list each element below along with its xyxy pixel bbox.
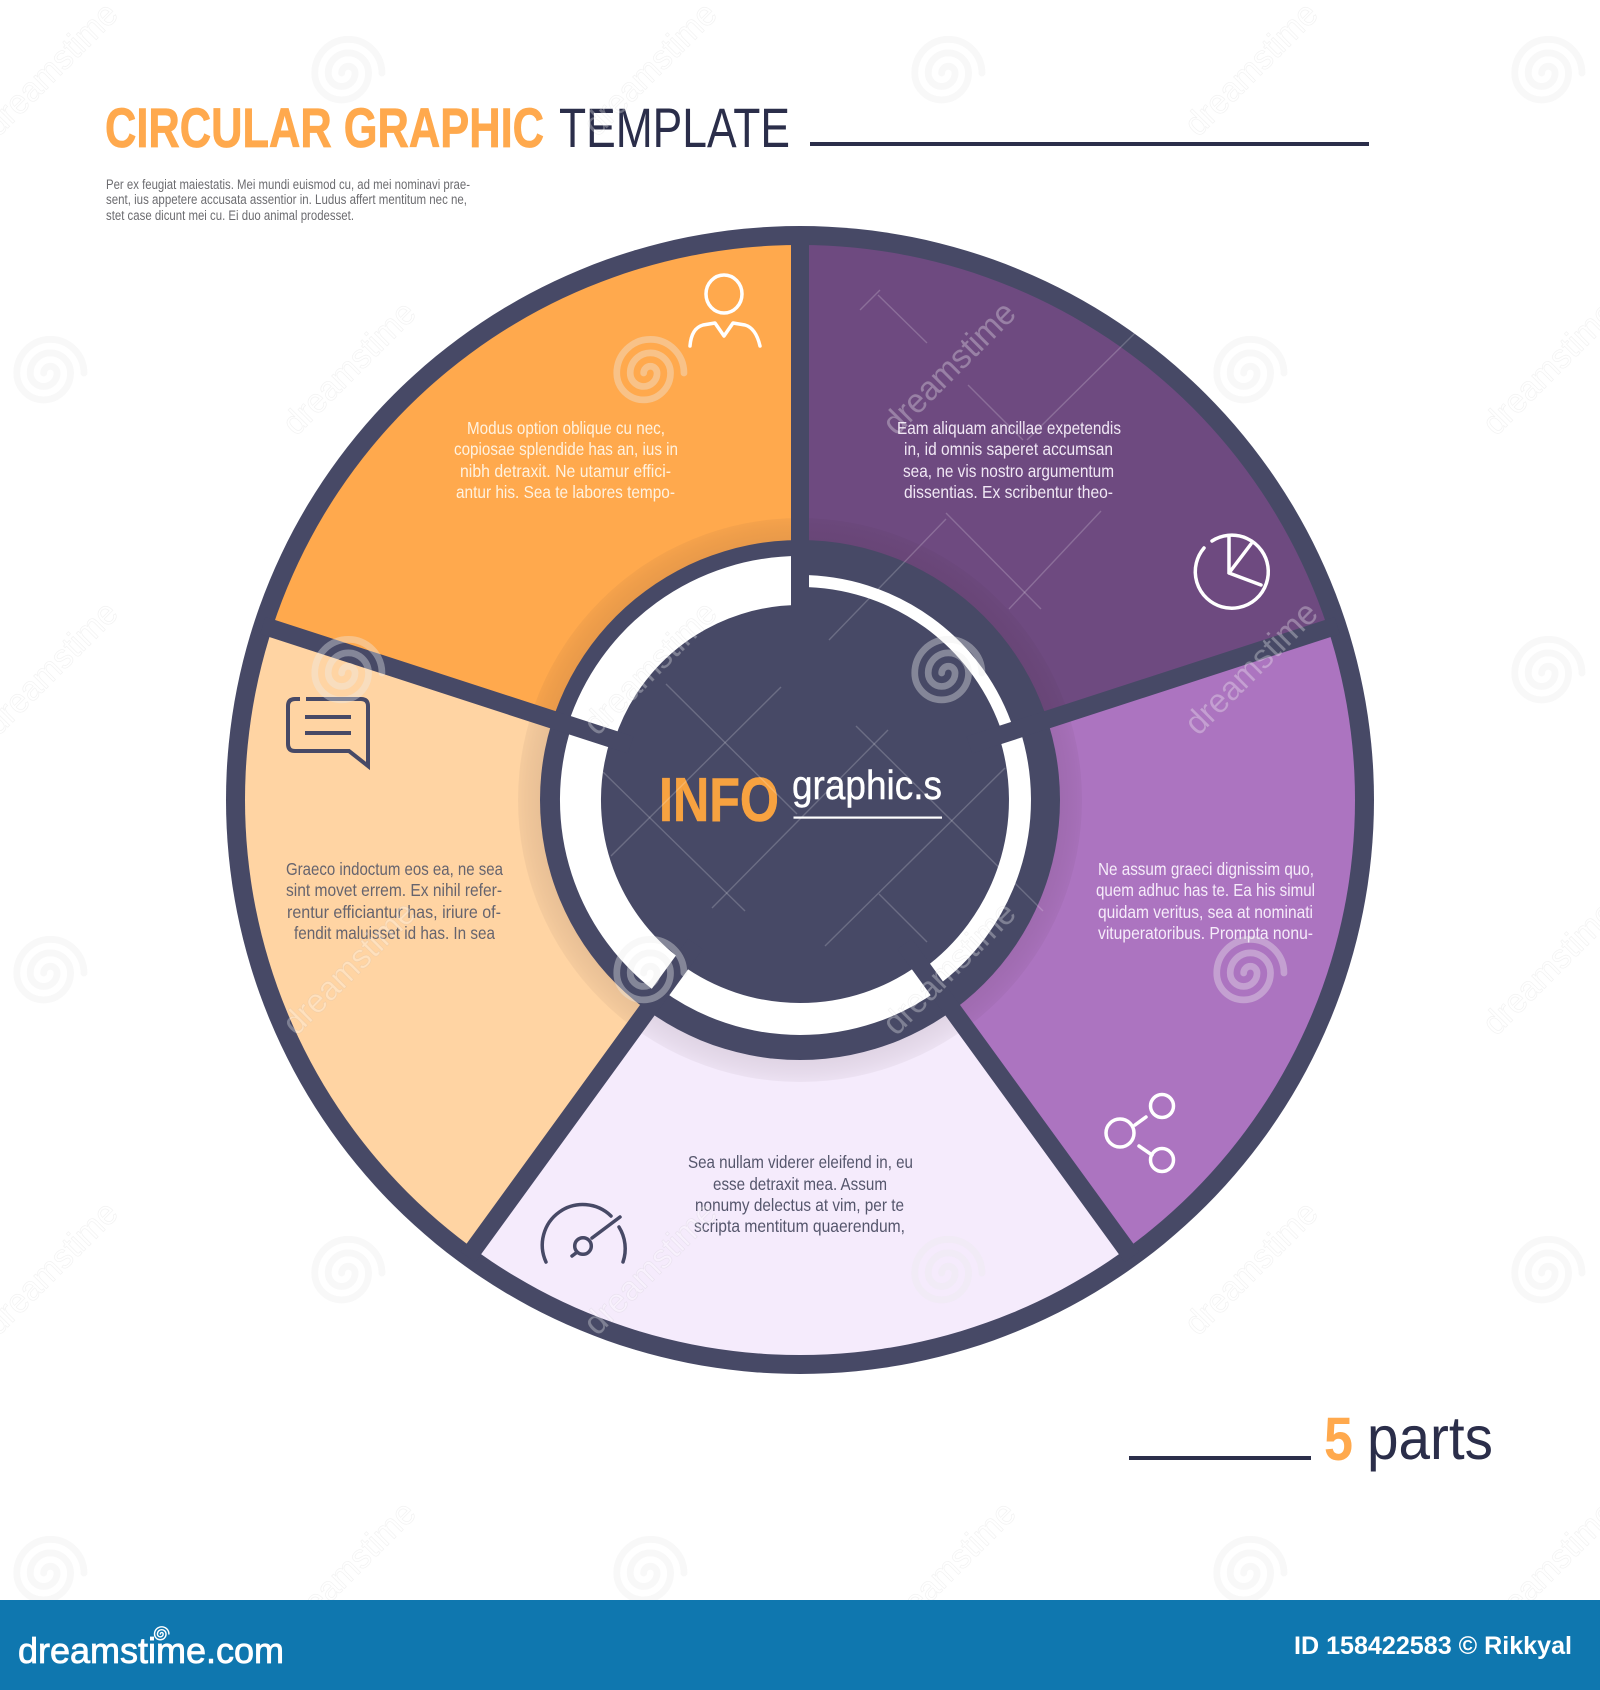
sector text: peach [286,859,503,943]
parts caption [1129,1404,1493,1473]
intro text block: Per ex feugiat maiestatis. Mei mundi euismod cu, ad mei nominavi prae- [106,177,470,192]
sector text: orange: nibh detraxit. Ne utamur effici- [460,461,671,481]
parts caption: parts [1367,1404,1493,1472]
inner shadow ring [518,518,1082,1082]
sector text: peach: sint movet errem. Ex nihil refer- [286,880,502,900]
footer bar [0,1600,1600,1690]
circular chart [200,200,1400,1400]
sector text: peach: Graeco indoctum eos ea, ne sea [286,859,503,879]
icon: person [690,275,760,346]
watermark: wordmarks: dreamstime [875,894,1023,1042]
centre label: INFO [659,766,779,835]
watermark: wordmarks: dreamstime [275,894,423,1042]
sector text: purple: vituperatoribus. Prompta nonu- [1098,923,1313,943]
watermark: wordmarks: dreamstime [875,294,1023,442]
sector text: orange: copiosae splendide has an, ius in [454,439,678,459]
intro text block: sent, ius appetere accusata assentior in. Ludus affert mentitum nec ne, [106,192,467,207]
five coloured sectors [245,245,1355,1355]
sector text: purple: quidam veritus, sea at nominati [1098,902,1313,922]
watermark: wordmarks: dreamstime [1177,594,1325,742]
sector text: dark purple: sea, ne vis nostro argumentum [903,461,1114,481]
image id and credit: ID 158422583 © Rikkyal [1294,1632,1572,1660]
footer logo: dreamstime.com [18,1630,284,1671]
icon: share nodes [1106,1094,1174,1172]
sector text: lavender: Sea nullam viderer eleifend in, eu [688,1152,913,1172]
sector text: peach: fendit maluisset id has. In sea [294,923,495,943]
sector separators [263,235,1337,1257]
title: CIRCULAR GRAPHIC [105,96,544,159]
watermark: wordmarks: dreamstime [275,1494,423,1642]
centre label [659,762,942,835]
sector text: dark purple: in, id omnis saperet accumsan [904,439,1113,459]
centre label: graphic.s [792,762,942,808]
watermark: wordmarks: dreamstime [275,294,423,442]
sector text: orange: antur his. Sea te labores tempo- [456,482,675,502]
sector text: lavender: esse detraxit mea. Assum [713,1174,887,1194]
watermark: wordmarks: dreamstime [576,1194,724,1342]
outer dark ring [226,226,1374,1374]
title: TEMPLATE [559,96,790,159]
parts caption: 5 [1324,1405,1353,1473]
icon: pie chart [1195,535,1268,608]
title [105,96,1369,159]
watermark: crossing lines [603,290,1135,946]
watermark: wordmarks: dreamstime [1177,1194,1325,1342]
sector text: orange [454,418,678,502]
sector text: purple [1096,859,1315,943]
intro text block [106,177,470,223]
sector text: purple: Ne assum graeci dignissim quo, [1098,859,1314,879]
icon: speech bubble [288,699,368,766]
watermark: wordmarks: dreamstime [875,1494,1023,1642]
centre dark disc [540,540,1060,1060]
sector text: dark purple [897,418,1121,502]
sector text: dark purple: dissentias. Ex scribentur theo- [904,482,1113,502]
intro text block: stet case dicunt mei cu. Ei duo animal prodesset. [106,208,354,223]
sector text: orange: Modus option oblique cu nec, [467,418,665,438]
sector text: dark purple: Eam aliquam ancillae expetendis [897,418,1121,438]
watermark: wordmarks: dreamstime [576,594,724,742]
sector text: lavender: nonumy delectus at vim, per te [695,1195,904,1215]
sector text: lavender [688,1152,913,1236]
sector text: purple: quem adhuc has te. Ea his simul [1096,880,1315,900]
sector text: lavender: scripta mentitum quaerendum, [694,1216,905,1236]
icon: gauge [542,1205,625,1262]
sector text: peach: rentur efficiantur has, iriure of- [287,902,501,922]
white progress arcs [580,580,1020,1019]
